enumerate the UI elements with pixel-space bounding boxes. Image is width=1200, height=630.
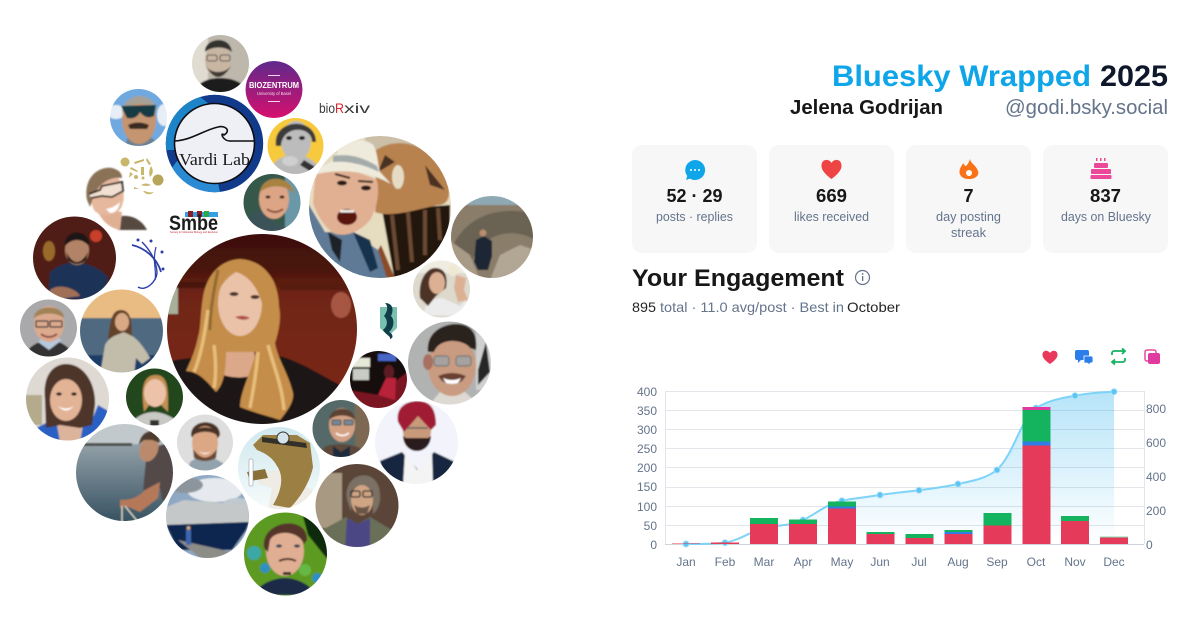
bars: quotes xyxy=(1022,407,1050,410)
avatar: man in red turban and suit xyxy=(375,401,458,484)
panel: days on Bluesky: days on Bluesky xyxy=(1061,210,1152,224)
right axis labels: 800 xyxy=(1146,402,1166,416)
panel: posts and replies xyxy=(632,145,757,253)
cumulative line xyxy=(686,392,1114,544)
logo: bioRxiv xyxy=(319,100,370,116)
avatar: woman with glasses, cut out xyxy=(86,158,164,230)
icon: info xyxy=(856,270,870,284)
icon: cake xyxy=(1090,158,1112,179)
panel: day posting streak: day posting xyxy=(936,210,1001,224)
left axis labels xyxy=(637,385,657,552)
logo: bioRxiv: R xyxy=(335,100,344,116)
avatar: blonde woman against green xyxy=(126,368,183,426)
heading: Your Engagement: Your Engagement xyxy=(632,265,844,292)
left axis labels: 150 xyxy=(637,480,657,494)
bars: reposts xyxy=(750,410,1128,538)
title: Bluesky Wrapped xyxy=(832,60,1091,93)
avatar: Biozentrum logo: University of Basel xyxy=(257,91,291,96)
month labels: Aug xyxy=(947,555,969,569)
month labels: Dec xyxy=(1103,555,1125,569)
avatar cluster xyxy=(18,33,535,599)
logo: blue swirl xyxy=(132,239,164,288)
engagement summary: October xyxy=(847,299,900,315)
panel: likes received: likes received xyxy=(794,210,869,224)
avatar: cartoon dinosaur with goggles and lab coat xyxy=(236,425,320,511)
avatar: Vardi Lab logo xyxy=(165,94,264,193)
icon: heart xyxy=(822,160,842,179)
chart: monthly engagement with cumulative line xyxy=(637,385,1166,569)
title: 2025 xyxy=(1100,60,1168,93)
left axis labels: 300 xyxy=(637,423,657,437)
avatar: smiling ginger man xyxy=(244,174,300,231)
logo: bioRxiv: bio xyxy=(319,100,335,116)
display name: Jelena Godrijan xyxy=(790,97,943,119)
engagement summary: 895 xyxy=(632,299,656,315)
panel: day posting streak xyxy=(906,145,1031,253)
month labels: Apr xyxy=(794,555,812,569)
avatar: man with goatee against green art xyxy=(244,512,327,596)
avatar: main portrait, blonde woman xyxy=(167,234,357,424)
left axis labels: 200 xyxy=(637,461,657,475)
logo: SMBE: Society for Molecular Biology and Evolution xyxy=(170,230,218,234)
icon: diatoms beside the woman xyxy=(120,158,164,194)
right axis labels xyxy=(1146,402,1166,552)
bars: replies xyxy=(828,442,1050,534)
left axis labels: 250 xyxy=(637,442,657,456)
panel: day posting streak: 7 xyxy=(963,186,974,206)
logo: bioRxiv: xiv xyxy=(344,100,370,116)
left axis labels: 100 xyxy=(637,500,657,514)
month labels: Jan xyxy=(676,555,696,569)
avatar: research ship at dock xyxy=(166,475,249,558)
avatar: woman standing on coastal rocks xyxy=(449,194,535,280)
logo: SMBE: Smbe xyxy=(169,212,218,235)
icon: legend replies xyxy=(1075,350,1093,365)
icon: speech bubble xyxy=(685,160,705,180)
month labels: Jul xyxy=(911,555,927,569)
icon: flame xyxy=(959,159,978,179)
month labels: May xyxy=(831,555,853,569)
panel: posts and replies: posts · replies xyxy=(656,210,733,224)
avatar: smiling man with mohawk and glasses xyxy=(408,322,491,404)
avatar: woman at sea xyxy=(80,290,163,372)
cumulative area xyxy=(686,392,1114,544)
avatar: man with sunglasses xyxy=(110,89,167,146)
panel: likes received: 669 xyxy=(816,186,847,206)
icon: legend likes xyxy=(1042,351,1058,364)
handle: @godi.bsky.social xyxy=(1005,97,1168,119)
panel: days on Bluesky: 837 xyxy=(1090,186,1121,206)
right axis labels: 200 xyxy=(1146,504,1166,518)
avatar: woman in lab holding an object xyxy=(413,260,470,318)
avatar: smiling bearded man, grey background xyxy=(177,414,233,470)
logo: seahorse xyxy=(380,303,397,339)
avatar: person in red-lit control room xyxy=(350,351,407,408)
month labels: Feb xyxy=(715,555,736,569)
bars: likes xyxy=(672,446,1128,544)
avatar: man with glasses in suit, grey background xyxy=(20,300,77,356)
avatar: Biozentrum logo: BIOZENTRUM xyxy=(249,81,299,90)
chart gridlines xyxy=(665,391,1144,544)
avatar: bearded man in navy shirt xyxy=(33,216,116,300)
panel: posts and replies: 52 · 29 xyxy=(666,186,722,206)
left axis labels: 0 xyxy=(650,538,657,552)
month labels: Nov xyxy=(1064,555,1086,569)
avatar: Biozentrum logo xyxy=(246,61,302,118)
left axis labels: 50 xyxy=(644,519,657,533)
month labels xyxy=(676,555,1125,569)
avatar: man with headphones and microphone xyxy=(268,118,324,174)
avatar: Vardi Lab logo: Vardi Lab xyxy=(179,150,250,169)
month labels: Sep xyxy=(986,555,1008,569)
left axis labels: 350 xyxy=(637,404,657,418)
left axis labels: 400 xyxy=(637,385,657,399)
panel: days on Bluesky xyxy=(1043,145,1168,253)
icon: legend reposts xyxy=(1112,348,1125,364)
engagement summary: total · 11.0 avg/post · Best in xyxy=(660,299,844,315)
panel: day posting streak: streak xyxy=(951,226,987,240)
legend xyxy=(1042,348,1160,365)
avatar: smiling woman with dark hair xyxy=(26,358,109,440)
avatar: man in glasses and blazer xyxy=(312,400,370,457)
panel: likes received xyxy=(769,145,894,253)
cumulative points xyxy=(683,389,1117,547)
month labels: Mar xyxy=(754,555,774,569)
avatar: man leaning over water holding a rope xyxy=(74,422,176,524)
month labels: Jun xyxy=(870,555,890,569)
right axis labels: 0 xyxy=(1146,538,1153,552)
right axis labels: 400 xyxy=(1146,470,1166,484)
right axis labels: 600 xyxy=(1146,436,1166,450)
icon: legend quotes xyxy=(1145,350,1160,364)
avatar: bearded man, black and white xyxy=(192,35,249,92)
month labels: Oct xyxy=(1027,555,1046,569)
avatar: man with hat beside a dinosaur skull xyxy=(309,136,451,278)
avatar: man with grey curly hair xyxy=(314,462,400,550)
